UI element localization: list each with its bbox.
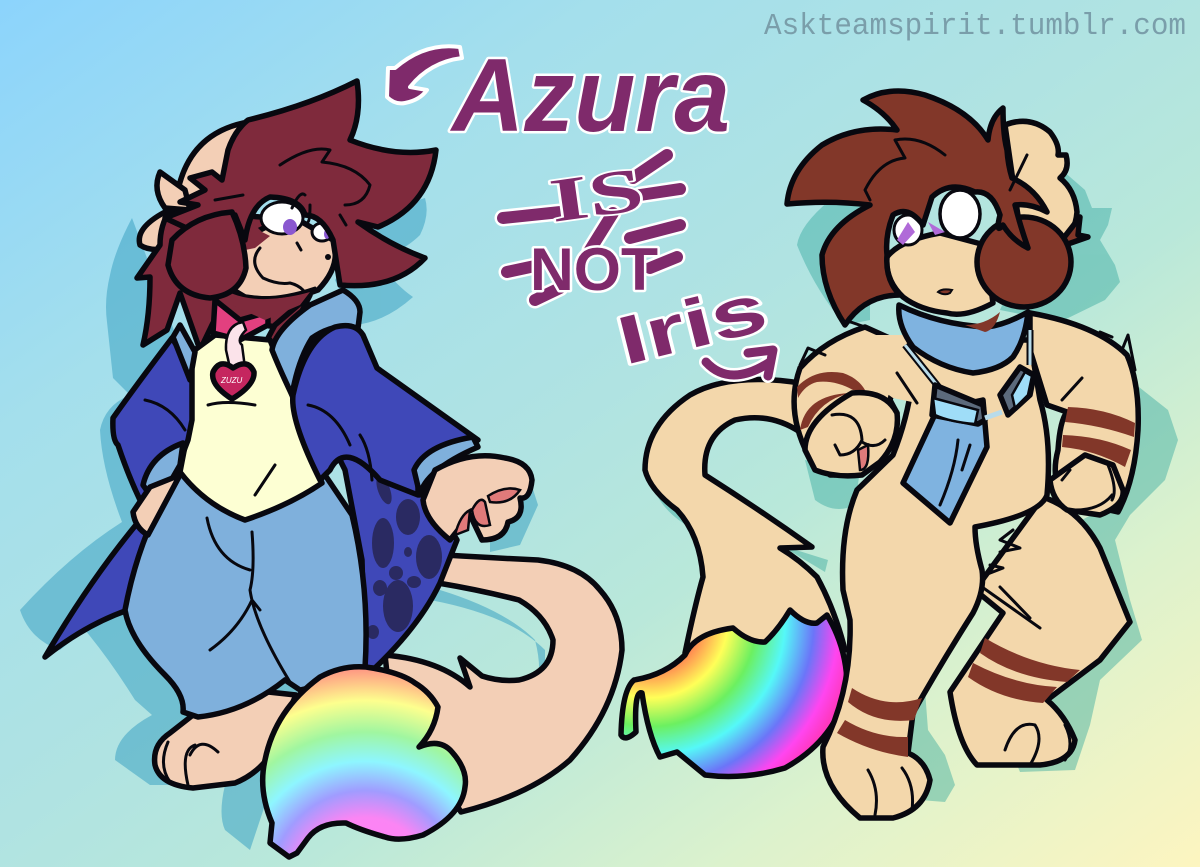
- coat tail left: [45, 520, 150, 657]
- back hair: [137, 210, 300, 350]
- front hair: [165, 81, 436, 298]
- left arrow: [387, 46, 462, 103]
- sleeve cuff: [414, 437, 478, 495]
- name Azura: Azura: [449, 38, 730, 154]
- hair: [787, 91, 1071, 325]
- torso and left leg: [823, 340, 1048, 818]
- muzzle lines: [255, 243, 303, 290]
- hair bulb: [977, 217, 1071, 307]
- face: [225, 202, 335, 320]
- hair strand lines: [865, 139, 1027, 200]
- name Iris: Iris: [610, 270, 774, 380]
- coat body panel with spots: [310, 400, 457, 668]
- chest fill joining arm and torso: [860, 335, 925, 402]
- foot: [155, 690, 296, 788]
- drop shadow: Iris: [648, 170, 1178, 802]
- chest fur line: [897, 373, 917, 403]
- word IS: IS: [545, 154, 648, 235]
- Azura tail: [385, 555, 622, 812]
- eyes: [894, 215, 922, 245]
- goggles: [932, 367, 1034, 424]
- shirt: [180, 335, 322, 520]
- paw: [423, 456, 532, 540]
- goggle strap: [905, 330, 1030, 395]
- right leg: [950, 497, 1130, 765]
- label: Iris with arrow: [610, 270, 774, 380]
- left arm: [794, 320, 905, 475]
- arm stripes: [1062, 407, 1135, 467]
- Iris tail: [645, 379, 845, 653]
- neck fur: [232, 292, 310, 320]
- arm stripes: [797, 372, 865, 430]
- left leg stripes: [837, 688, 922, 757]
- label: IS NOT: [503, 154, 680, 303]
- eyes: [261, 202, 332, 241]
- character: Iris: [621, 91, 1138, 818]
- right leg stripes: [968, 638, 1080, 703]
- right arm: [1030, 313, 1138, 512]
- hair strand lines: [215, 149, 370, 225]
- coat collar: [173, 290, 360, 395]
- right ear: [1005, 121, 1088, 245]
- right paw: [1050, 455, 1123, 515]
- pants: [125, 470, 366, 717]
- face: [887, 190, 993, 314]
- strike lines: [503, 155, 680, 300]
- coat left sleeve: [113, 338, 192, 500]
- drop shadow: Azura: [20, 198, 545, 850]
- ears: [139, 123, 280, 249]
- left paw: [805, 393, 897, 476]
- hair strand behind collar: [267, 295, 310, 352]
- left sleeve cuff and hand: [133, 443, 183, 535]
- brow shading: [245, 215, 270, 250]
- collar and heart tag: [213, 300, 268, 399]
- word NOT: NOT: [530, 236, 658, 303]
- spots: [367, 474, 442, 639]
- character: Azura: [45, 81, 622, 857]
- label: Azura with arrow: [387, 38, 730, 154]
- hair bulb: [168, 212, 246, 298]
- scarf: [899, 305, 1028, 523]
- right arrow: [706, 350, 773, 376]
- rainbow tail tuft: [263, 667, 465, 857]
- coat right sleeve: [293, 326, 478, 495]
- tail paint rainbow: [621, 610, 847, 776]
- watermark: Askteamspirit.tumblr.com: [764, 9, 1186, 44]
- fur and toe lines: [868, 530, 1030, 815]
- heart tag: ZUZU: [220, 376, 243, 385]
